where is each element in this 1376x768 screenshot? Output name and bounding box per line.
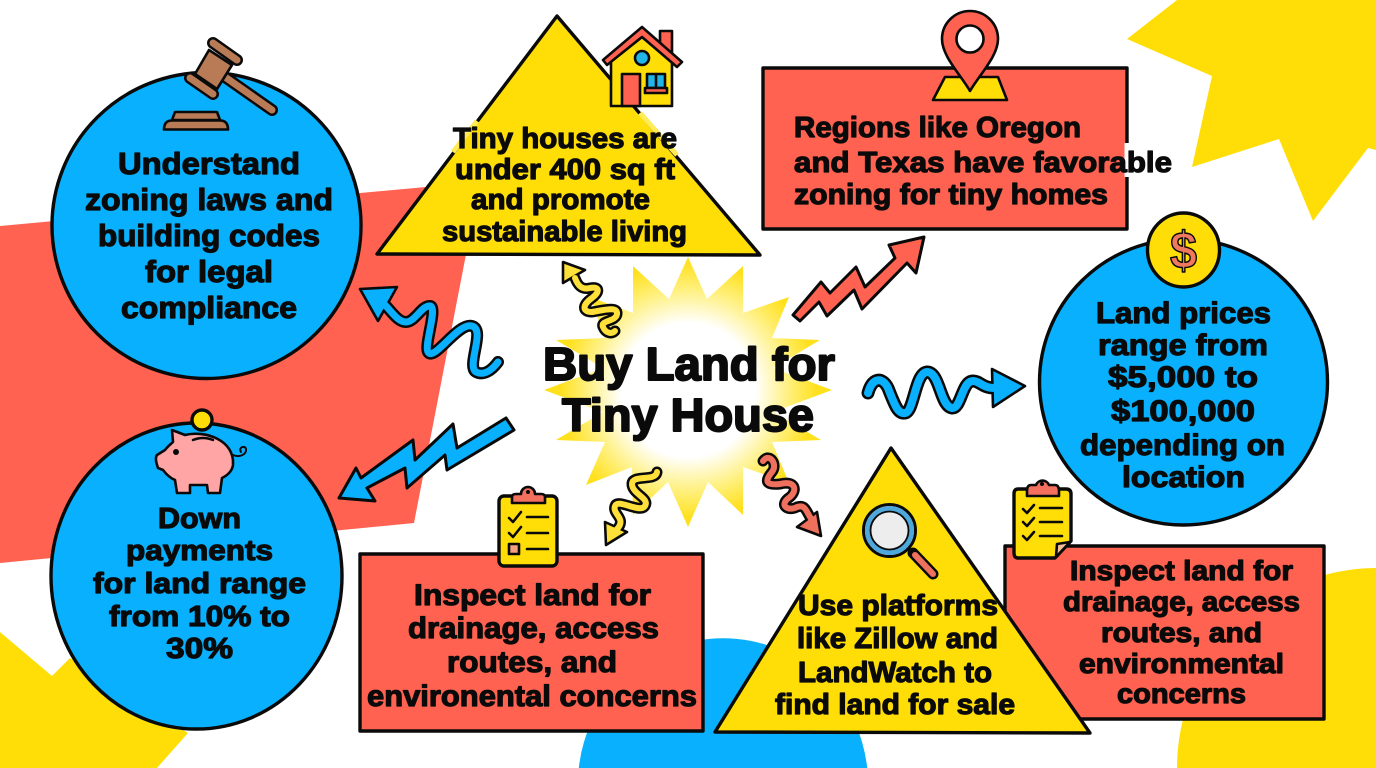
text: platforms: Use platforms	[798, 590, 998, 622]
text: zoning laws	[85, 146, 333, 325]
icon: house	[603, 27, 682, 106]
panel: down payments circle	[51, 410, 342, 729]
icon: clipboard	[499, 487, 557, 566]
text: platforms: find land for sale	[775, 689, 1015, 721]
text: zoning laws: zoning laws and	[85, 182, 333, 217]
panel: inspect land rectangle right	[1005, 481, 1324, 719]
text: land prices: Land prices	[1096, 297, 1271, 330]
text: inspect land: routes, and	[447, 646, 617, 679]
panel: inspect land rectangle	[360, 487, 703, 731]
text: inspect land right: routes, and	[1101, 617, 1262, 648]
text: zoning laws: building codes	[98, 218, 320, 253]
text: regions: and Texas have favorable	[794, 147, 1172, 179]
text: tiny houses	[442, 123, 687, 248]
title	[543, 338, 835, 441]
text: tiny houses: sustainable living	[442, 216, 687, 248]
text: regions: zoning for tiny homes	[794, 179, 1108, 211]
text: inspect land: Inspect land for	[414, 579, 651, 612]
text: land prices: $5,000 to	[1108, 361, 1258, 394]
central starburst	[544, 257, 832, 527]
icon: magnifying glass	[864, 504, 933, 574]
arrow: red wavy to platforms triangle	[763, 458, 821, 536]
text: inspect land right: concerns	[1117, 678, 1246, 709]
text: inspect land right	[1063, 555, 1300, 709]
text: regions	[794, 112, 1172, 211]
arrow: blue wavy to zoning circle	[360, 287, 498, 373]
text: down payments	[93, 503, 306, 665]
panel: land prices circle	[1040, 213, 1328, 525]
text: inspect land right: environmental	[1079, 648, 1284, 679]
panel: regions rectangle	[763, 11, 1172, 229]
background shape: yellow bottom left	[0, 632, 188, 768]
text: down payments: payments	[126, 535, 273, 567]
panel: platforms triangle	[715, 448, 1090, 733]
text: regions: Regions like Oregon	[794, 112, 1081, 144]
text: land prices	[1080, 297, 1285, 494]
text: inspect land: drainage, access	[408, 612, 659, 645]
title: Buy Land for	[543, 338, 835, 390]
text: inspect land right: drainage, access	[1063, 586, 1300, 617]
icon: gavel	[164, 43, 272, 130]
text: land prices: depending on	[1080, 429, 1285, 462]
icon: map pin	[933, 11, 1007, 100]
icon: dollar coin: $	[1170, 222, 1197, 280]
text: platforms: like Zillow and	[797, 623, 998, 655]
text: zoning laws: Understand	[118, 146, 300, 181]
text: down payments: for land range	[93, 568, 306, 600]
text: zoning laws: for legal	[145, 254, 273, 289]
icon: dollar coin	[1148, 213, 1220, 287]
text: platforms: LandWatch to	[798, 657, 992, 689]
arrow: blue lightning to down payments circle	[339, 418, 514, 501]
text: down payments: Down	[158, 503, 241, 535]
text: tiny houses: and promote	[471, 184, 650, 216]
icon: piggy bank	[156, 410, 246, 493]
text: land prices: $100,000	[1111, 395, 1255, 428]
text: platforms	[775, 590, 1015, 721]
arrow: blue wavy to land prices circle	[868, 369, 1025, 413]
background shape: yellow circle bottom right	[1177, 568, 1376, 768]
text: zoning laws: compliance	[121, 290, 297, 325]
text: land prices: location	[1122, 461, 1245, 494]
text: land prices: range from	[1098, 329, 1268, 362]
arrow: yellow wavy to tiny houses triangle	[563, 262, 617, 333]
text: down payments: from 10% to	[109, 601, 290, 633]
background shape: blue circle bottom	[579, 638, 867, 768]
text: inspect land: environental concerns	[367, 680, 697, 713]
icon: clipboard with fold	[1014, 481, 1071, 558]
panel: zoning laws circle	[52, 43, 361, 378]
arrow: yellow wavy to inspect land rectangle	[605, 472, 657, 545]
text: inspect land	[367, 579, 697, 713]
panel: tiny houses triangle	[377, 16, 760, 255]
background shape: yellow star top right	[1127, 0, 1376, 221]
text: tiny houses: under 400 sq ft	[455, 154, 675, 186]
title: Tiny House	[562, 389, 814, 441]
text: inspect land right: Inspect land for	[1070, 555, 1293, 586]
background shape: red polygon	[0, 182, 480, 563]
arrow: red zigzag to regions rectangle	[793, 237, 924, 321]
text: down payments: 30%	[166, 633, 233, 665]
text: tiny houses: Tiny houses are	[453, 123, 677, 155]
